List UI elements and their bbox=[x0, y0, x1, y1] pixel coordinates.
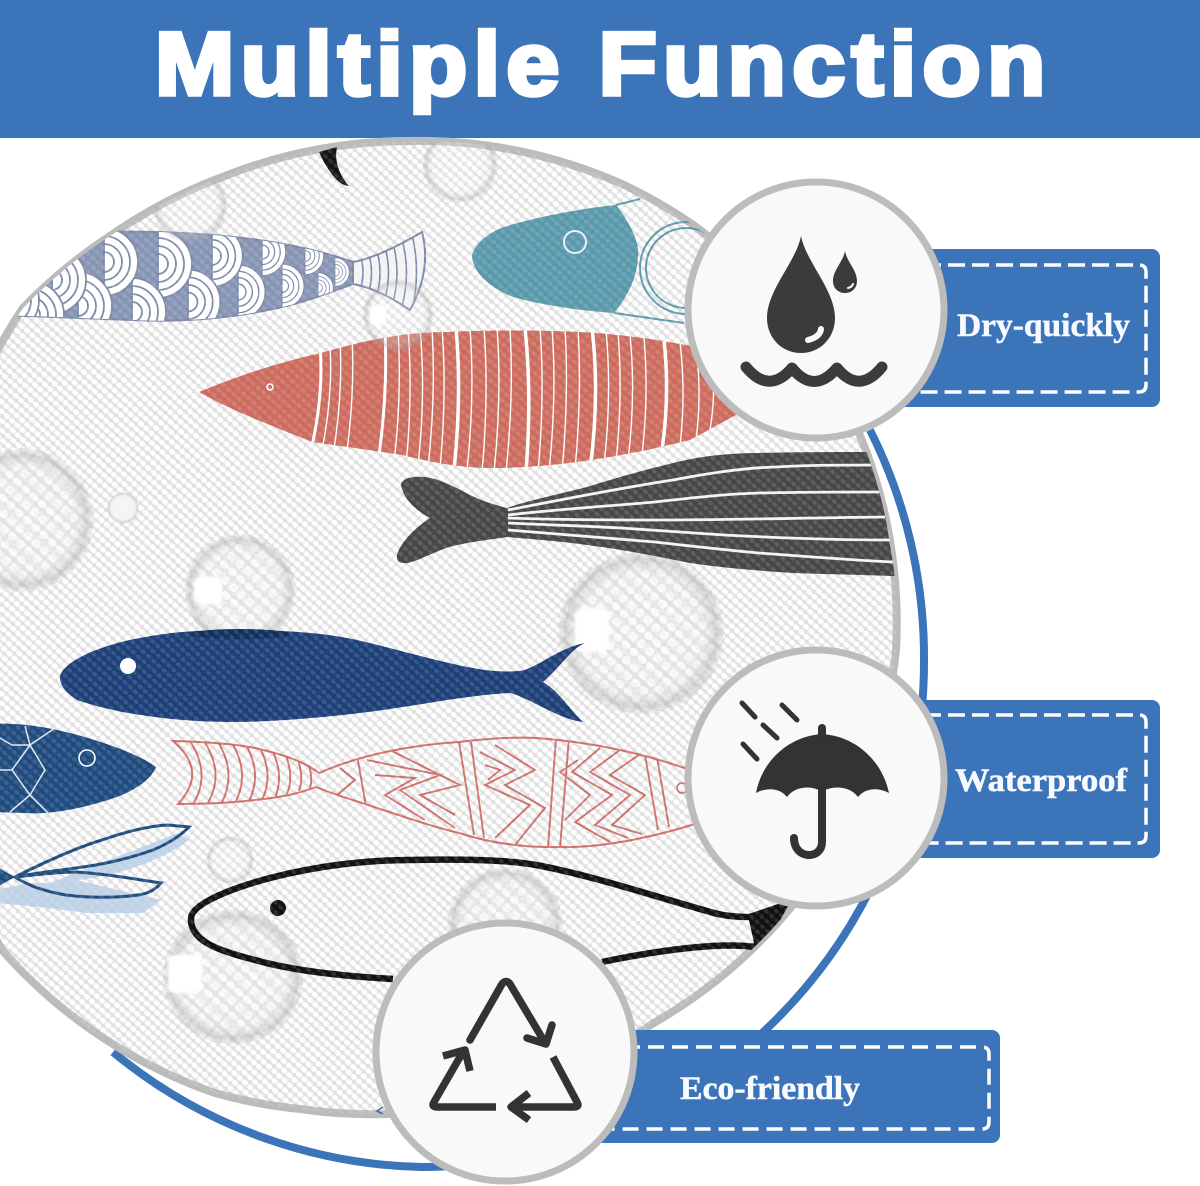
fish: teal bbox=[472, 199, 732, 323]
panel: fabric swatch circle bbox=[0, 127, 910, 1130]
small blue fragment near bottom bbox=[377, 1107, 383, 1114]
fabric contents clipped to the circle bbox=[0, 127, 910, 1130]
pole and handle bbox=[794, 790, 822, 855]
label: Dry-quickly bbox=[880, 249, 1160, 407]
icon: recycling triangle bbox=[376, 923, 634, 1181]
fish: black outlined bbox=[191, 860, 785, 979]
title banner bbox=[0, 0, 1200, 138]
rain bbox=[742, 703, 797, 759]
blue outer ring bbox=[113, 430, 924, 1167]
fish: navy with net pattern bbox=[0, 724, 156, 815]
fish: grey-blue scales bbox=[17, 230, 426, 322]
label: Eco-friendly: Eco-friendly bbox=[680, 1071, 860, 1107]
fish: navy bbox=[60, 629, 585, 722]
fish: red striped bbox=[199, 328, 745, 472]
small drop bbox=[833, 251, 857, 293]
large drop bbox=[767, 236, 835, 353]
fabric weave overlay bbox=[0, 130, 910, 1130]
fish: red outlined zigzag bbox=[173, 738, 695, 848]
label: Waterproof bbox=[880, 700, 1160, 858]
label: Waterproof: Waterproof bbox=[955, 763, 1128, 799]
title text: Multiple Function bbox=[155, 14, 1045, 114]
fish: blue tail fins bbox=[0, 825, 189, 913]
label: Dry-quickly: Dry-quickly bbox=[957, 308, 1131, 344]
label: Eco-friendly bbox=[520, 1030, 1000, 1143]
fish: dark grey with white lines bbox=[397, 452, 895, 576]
icon: water drops over waves bbox=[688, 182, 944, 438]
waves bbox=[746, 367, 882, 382]
canopy bbox=[756, 734, 889, 797]
water droplets bbox=[0, 127, 725, 1045]
black fin at top bbox=[319, 147, 349, 186]
knob bbox=[818, 728, 826, 736]
icon: umbrella in rain bbox=[688, 650, 944, 906]
